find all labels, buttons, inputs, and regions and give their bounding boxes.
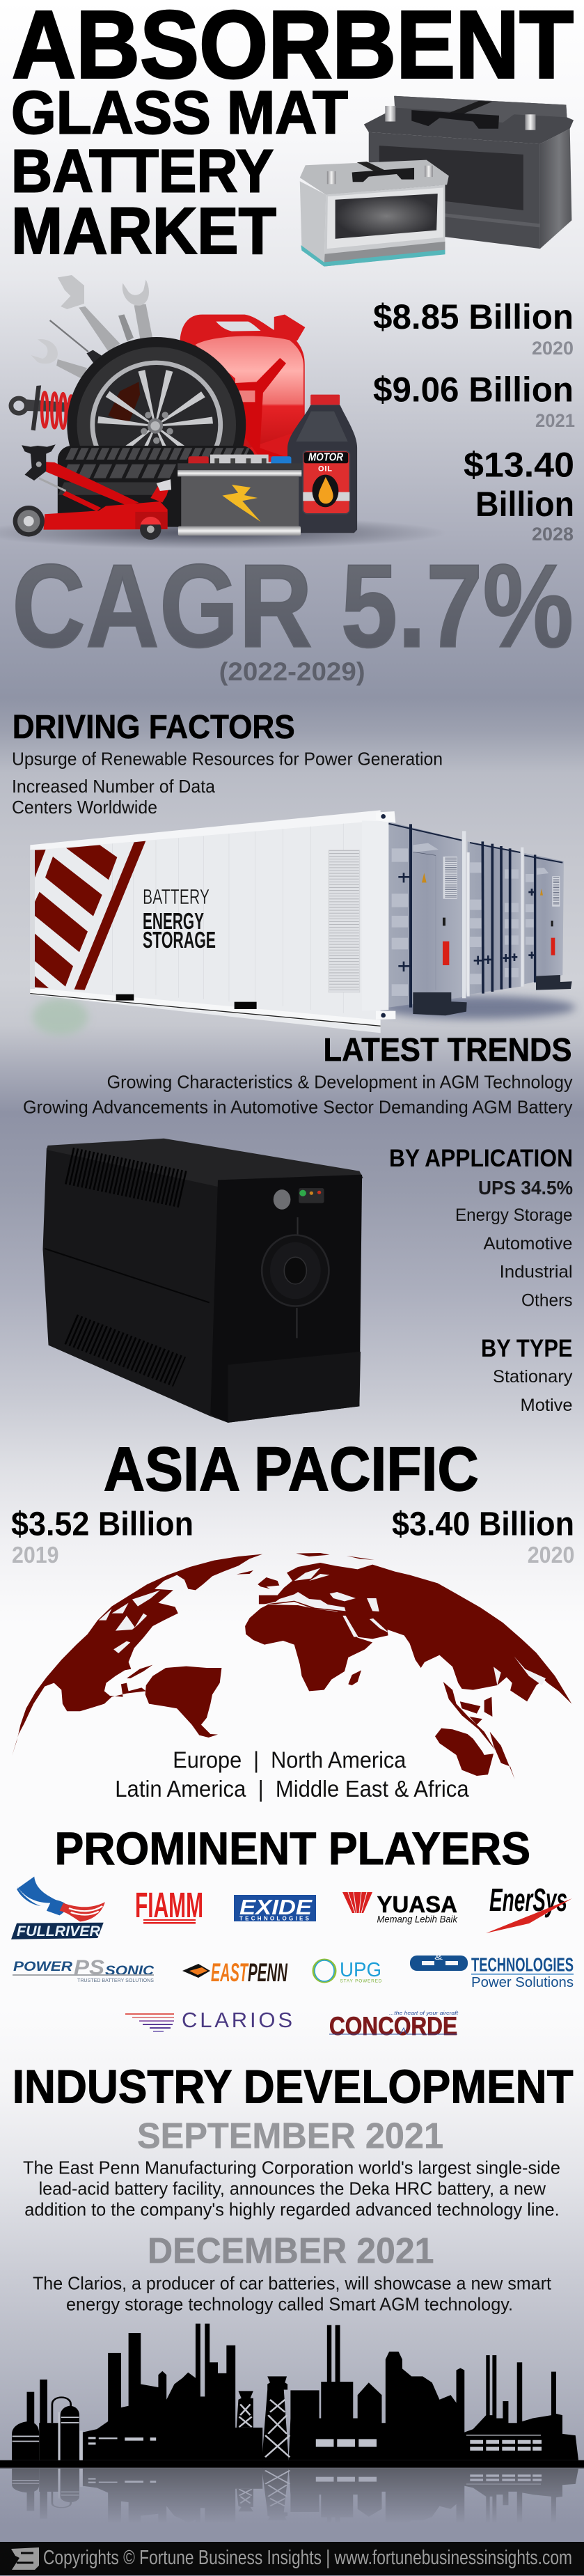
panel: industry development	[13, 2061, 574, 2314]
small wrench	[31, 339, 87, 379]
text: September 2021 development: The East Penn Manufacturing Corporation world's largest single-side	[23, 2157, 560, 2178]
shock absorber	[11, 385, 73, 430]
text: other segments	[455, 1205, 573, 1311]
logo: UPG: STAY POWERED	[340, 1979, 382, 1983]
logo: C&D Technologies: &	[434, 1954, 443, 1961]
text: September 2021 development	[23, 2157, 560, 2219]
logo: Yuasa	[342, 1891, 458, 1925]
logo: Yuasa: YUASA	[377, 1891, 457, 1917]
logo: UPG: UPG	[340, 1959, 381, 1981]
logo: Clarios: CLARIOS	[182, 2008, 292, 2032]
regional value 2020	[392, 1506, 575, 1568]
oil label lettering: MOTOR	[308, 451, 343, 464]
panel: by type	[481, 1335, 573, 1415]
skyline reflection	[0, 2467, 584, 2517]
logo: C&D Technologies: Power Solutions	[471, 1975, 574, 1990]
text: latest trends list: Growing Advancements in Automotive Sector Demanding AGM Battery	[23, 1096, 572, 1117]
text: December 2021 development: The Clarios, a producer of car batteries, will showcase a new smart	[33, 2273, 552, 2294]
text: other regions: Latin America | Middle East & Africa	[115, 1776, 469, 1802]
text: other regions	[115, 1747, 469, 1802]
logo: East Penn: PENN	[248, 1958, 288, 1987]
text: leading segment: UPS 34.5%	[478, 1177, 573, 1199]
title: GLASS MAT	[11, 79, 348, 146]
text: other segments: Others	[521, 1291, 572, 1311]
icon: two AGM batteries	[300, 96, 574, 267]
regional value 2019	[11, 1506, 194, 1568]
front wall	[30, 810, 381, 1033]
oil label lettering: OIL	[318, 465, 332, 474]
logo: East Penn	[182, 1958, 288, 1987]
illustration: automotive tools, tyre, fuel can, oil and jack	[0, 275, 447, 549]
logo: Clarios	[125, 2008, 292, 2032]
text: other segments: Industrial	[500, 1263, 573, 1282]
ventilation grille	[329, 850, 360, 992]
logo: Power-Sonic	[13, 1956, 154, 1983]
logo: Power-Sonic: PS	[74, 1956, 104, 1979]
market value 2028: Billion	[475, 485, 574, 524]
heading: Asia Pacific: ASIA PACIFIC	[104, 1434, 479, 1504]
text: driving factors list: Centers Worldwide	[12, 797, 157, 818]
text: September 2021 development: addition to the company's highly regarded advanced technology line.	[24, 2199, 560, 2219]
title	[11, 0, 574, 268]
market value 2020: 2020	[532, 338, 574, 359]
adjustable wrench	[58, 275, 120, 352]
text: September 2021 development: lead-acid battery facility, announces the Deka HRC battery, a new	[39, 2178, 546, 2199]
world map globe	[12, 1553, 571, 1779]
text: December 2021 development	[33, 2273, 552, 2314]
heading: prominent players: PROMINENT PLAYERS	[54, 1822, 530, 1874]
logo: Exide: TECHNOLOGIES	[239, 1915, 310, 1922]
coastline details	[99, 1568, 546, 1685]
text: December 2021 development: energy storage technology called Smart AGM technology.	[66, 2293, 513, 2314]
market value 2028: $13.40	[464, 446, 574, 485]
panel: company logos	[11, 1877, 574, 2040]
text: latest trends list: Growing Characteristics & Development in AGM Technology	[107, 1072, 573, 1093]
illustration: UPS unit	[43, 1139, 363, 1423]
market value 2028: 2028	[532, 524, 574, 545]
text: types: Stationary	[493, 1367, 573, 1387]
market value 2021: 2021	[535, 410, 575, 431]
title: BATTERY	[11, 138, 274, 205]
container lettering: ENERGY	[143, 908, 204, 934]
container lettering: STORAGE	[143, 927, 216, 953]
regional value 2020: $3.40 Billion	[392, 1506, 574, 1543]
logo: EnerSys	[486, 1882, 572, 1933]
logo: Yuasa: Memang Lebih Baik	[377, 1914, 458, 1925]
footer bar	[0, 2542, 584, 2575]
oil label lettering	[308, 451, 343, 474]
CAGR heading: (2022-2029)	[219, 657, 365, 686]
side wall with doors	[362, 811, 572, 1020]
car battery	[177, 455, 301, 536]
oil bottle	[287, 395, 357, 533]
heading: December 2021: DECEMBER 2021	[148, 2231, 434, 2272]
open wrench	[123, 280, 152, 339]
icon: Fortune Business Insights mark	[11, 2547, 39, 2570]
red stripe graphic	[35, 841, 145, 990]
text: latest trends list	[23, 1072, 573, 1117]
text: driving factors list: Upsurge of Renewable Resources for Power Generation	[12, 748, 443, 769]
trolley jack	[13, 444, 171, 540]
market value 2028	[464, 446, 574, 545]
logo: Concorde: CONCORDE	[329, 2012, 457, 2040]
heading: driving factors: DRIVING FACTORS	[13, 709, 295, 746]
panel: by application	[389, 1145, 573, 1311]
text: driving factors list	[12, 748, 443, 818]
text: types: Motive	[521, 1396, 572, 1415]
panel: driving factors	[12, 709, 443, 818]
logo: FIAMM: FIAMM	[135, 1885, 203, 1925]
illustration: industrial skyline with reflection	[0, 2323, 584, 2517]
drill bit	[118, 314, 134, 341]
screwdriver	[50, 320, 102, 364]
jerry can	[180, 315, 305, 462]
refinery silhouette	[0, 2324, 584, 2467]
heading: September 2021: SEPTEMBER 2021	[137, 2116, 443, 2157]
heading: by type: BY TYPE	[481, 1335, 572, 1362]
market value 2020	[373, 297, 574, 359]
text: types	[493, 1367, 573, 1415]
market value 2021	[373, 370, 575, 431]
logo: Power-Sonic: TRUSTED BATTERY SOLUTIONS	[77, 1977, 154, 1983]
logo: Fullriver	[11, 1877, 105, 1939]
logo: Power-Sonic: SONIC	[105, 1964, 154, 1978]
text: driving factors list: Increased Number of Data	[12, 776, 216, 797]
market value 2021: $9.06 Billion	[373, 370, 574, 409]
panel: latest trends	[23, 1031, 573, 1117]
logo: C&D Technologies	[410, 1954, 574, 1990]
window and pipe cut-outs	[13, 2412, 542, 2460]
illustration: battery energy storage container	[30, 810, 576, 1036]
container lettering	[143, 884, 216, 953]
tyre with alloy wheel	[67, 337, 246, 513]
lower tyre	[52, 446, 255, 527]
heading: latest trends: LATEST TRENDS	[323, 1031, 572, 1068]
logo: Fullriver: FULLRIVER	[17, 1923, 101, 1939]
regional value 2019: $3.52 Billion	[11, 1506, 194, 1543]
text: other segments: Automotive	[483, 1234, 572, 1254]
oil derrick lattice	[239, 2400, 290, 2457]
logo: Exide: EXIDE	[239, 1895, 313, 1919]
title: MARKET	[11, 194, 276, 268]
logo: FIAMM	[135, 1885, 203, 1925]
market value 2020: $8.85 Billion	[373, 297, 574, 336]
regional value 2020: 2020	[528, 1542, 575, 1568]
logo: UPG	[313, 1959, 382, 1983]
regional value 2019: 2019	[12, 1542, 58, 1568]
logo: East Penn: EAST	[211, 1958, 249, 1987]
text: other segments: Energy Storage	[455, 1205, 572, 1225]
logo: Power-Sonic: POWER	[13, 1960, 72, 1974]
logo: Concorde: ...the heart of your aircraft	[389, 2010, 459, 2016]
container lettering: BATTERY	[143, 884, 210, 909]
text: other regions: Europe | North America	[173, 1747, 407, 1772]
